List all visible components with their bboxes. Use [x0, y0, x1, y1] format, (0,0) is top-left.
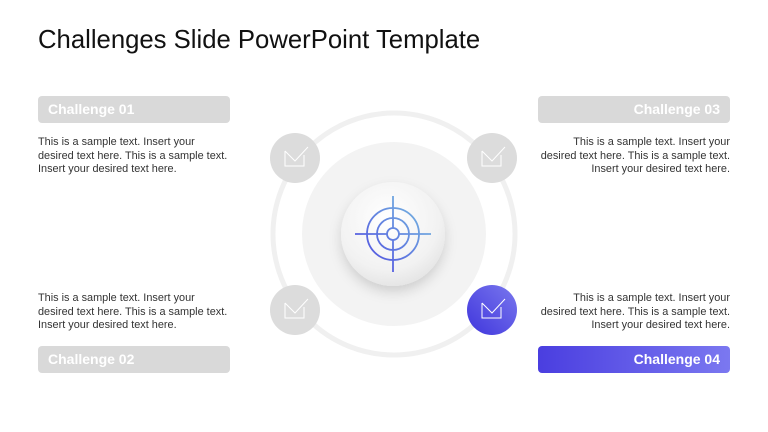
text: challenge 03: This is a sample text. Insert your: [573, 136, 730, 148]
text: challenge 04: Insert your desired text here.: [591, 319, 730, 331]
icon: check 02: [270, 285, 320, 335]
center ball with target icon: [341, 182, 445, 286]
label: Challenge 04: Challenge 04: [634, 351, 720, 367]
label: Challenge 02: [38, 346, 230, 373]
text: challenge 04: This is a sample text. Insert your: [573, 292, 730, 304]
text: challenge 02: [38, 292, 227, 331]
label: Challenge 02: Challenge 02: [48, 351, 134, 367]
text: challenge 01: desired text here. This is a sample text.: [38, 150, 227, 162]
text: challenge 02: Insert your desired text here.: [38, 319, 177, 331]
label: Challenge 03: Challenge 03: [634, 101, 720, 117]
title: Challenges Slide PowerPoint Template: [38, 26, 480, 54]
text: challenge 03: desired text here. This is a sample text.: [541, 150, 730, 162]
text: challenge 02: desired text here. This is a sample text.: [38, 306, 227, 318]
text: challenge 04: desired text here. This is a sample text.: [541, 306, 730, 318]
inner disc: [302, 142, 486, 326]
icon: check 03: [467, 133, 517, 183]
text: challenge 02: This is a sample text. Insert your: [38, 292, 195, 304]
label: Challenge 01: Challenge 01: [48, 101, 134, 117]
icon: check 01: [270, 133, 320, 183]
outer ring: [273, 113, 515, 355]
text: challenge 01: [38, 136, 227, 175]
text: challenge 01: This is a sample text. Insert your: [38, 136, 195, 148]
icon: check 04: [467, 285, 517, 335]
text: challenge 03: [541, 136, 730, 175]
text: challenge 03: Insert your desired text here.: [591, 163, 730, 175]
text: challenge 01: Insert your desired text here.: [38, 163, 177, 175]
label: Challenge 01: [38, 96, 230, 123]
label: Challenge 03: [538, 96, 730, 123]
label: Challenge 04: [538, 346, 730, 373]
text: challenge 04: [541, 292, 730, 331]
